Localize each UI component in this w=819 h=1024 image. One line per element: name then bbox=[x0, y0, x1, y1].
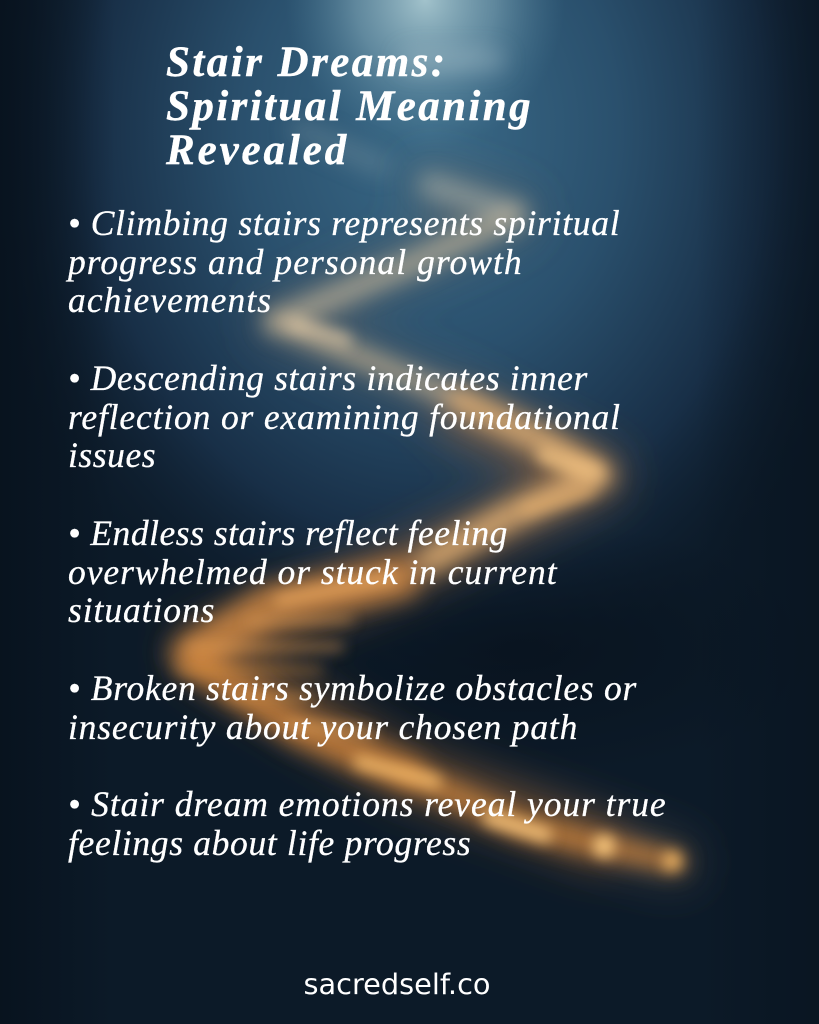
bullet: endless stairs: overwhelmed or stuck in current bbox=[68, 552, 558, 592]
bullet: broken stairs: insecurity about your chosen path bbox=[68, 707, 578, 747]
bullet: climbing stairs bbox=[66, 203, 620, 320]
title: Revealed bbox=[166, 127, 349, 174]
bullet: endless stairs: • Endless stairs reflect feeling bbox=[68, 513, 508, 553]
title bbox=[166, 39, 533, 174]
bullet: climbing stairs: achievements bbox=[68, 280, 272, 320]
bullet: descending stairs: issues bbox=[68, 435, 156, 475]
bullet: stair dream emotions bbox=[68, 784, 667, 863]
title: Stair Dreams: bbox=[166, 39, 448, 86]
bullet: broken stairs bbox=[68, 668, 637, 747]
bullet: descending stairs bbox=[68, 358, 621, 475]
bullet: climbing stairs: progress and personal growth bbox=[68, 242, 523, 282]
bullet: stair dream emotions: • Stair dream emotions reveal your true bbox=[68, 784, 667, 824]
bullet: endless stairs bbox=[68, 513, 558, 630]
bullet: endless stairs: situations bbox=[68, 590, 215, 630]
bullet: stair dream emotions: feelings about life progress bbox=[68, 823, 471, 863]
footer: website: sacredself.co bbox=[303, 967, 491, 1001]
bullet: climbing stairs: • Climbing stairs represents spiritual bbox=[68, 203, 620, 243]
bullet: descending stairs: • Descending stairs indicates inner bbox=[68, 358, 588, 398]
title: Spiritual Meaning bbox=[166, 83, 533, 130]
bullet: descending stairs: reflection or examining foundational bbox=[68, 397, 621, 437]
bullet: broken stairs: • Broken stairs symbolize obstacles or bbox=[68, 668, 637, 708]
